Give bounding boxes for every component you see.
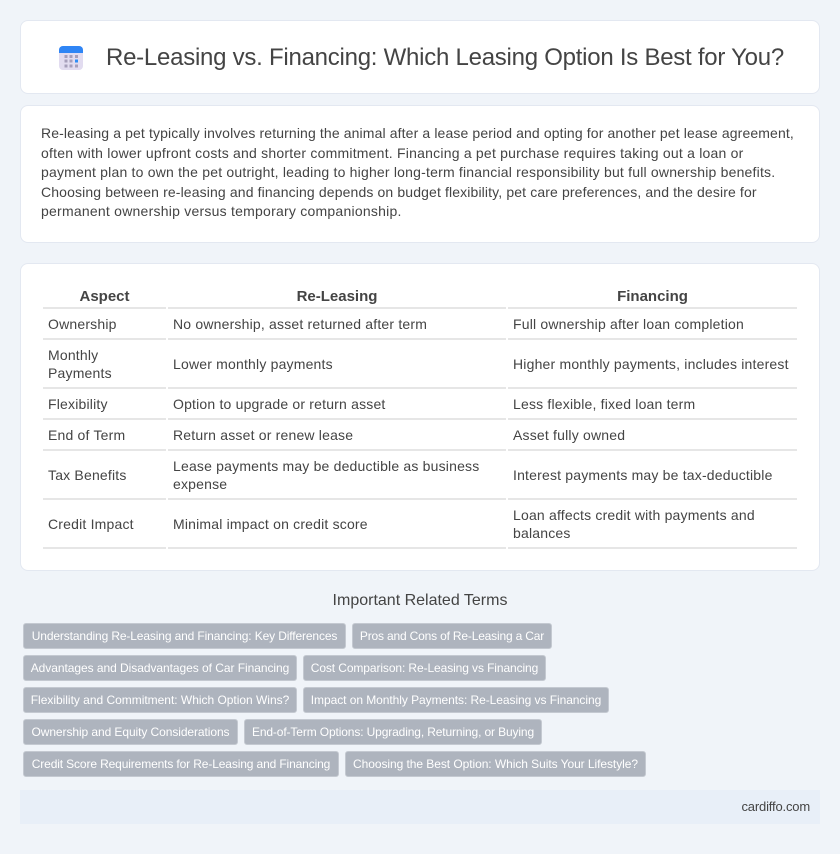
text: expense: [173, 476, 227, 492]
tags: related terms: Credit Score Requirements for Re-Leasing and Financing: [32, 757, 330, 771]
tags: related terms: Flexibility and Commitment: Which Option Wins?: [31, 693, 289, 707]
row: Flexibility: Flexibility: [48, 396, 108, 412]
tags: related terms: [23, 623, 646, 777]
table header: Re-Leasing: Re-Leasing: [297, 288, 377, 305]
text: Less flexible, fixed loan term: [513, 396, 695, 412]
tags: related terms: Choosing the Best Option: Which Suits Your Lifestyle?: [353, 757, 638, 771]
panel: comparison table: [20, 263, 820, 571]
text: Interest payments may be tax-deductible: [513, 467, 773, 483]
intro text: often with lower upfront costs and shorter commitment. Financing a pet purchase requires taking out a loan or: [41, 145, 744, 161]
tags: related terms: Understanding Re-Leasing and Financing: Key Differences: [32, 629, 337, 643]
text: Asset fully owned: [513, 427, 625, 443]
intro text: permanent ownership versus temporary companionship.: [41, 203, 402, 219]
tags: related terms: Ownership and Equity Considerations: [32, 725, 229, 739]
text: Loan affects credit with payments and: [513, 507, 755, 523]
text: Option to upgrade or return asset: [173, 396, 386, 412]
tags: related terms: Impact on Monthly Payments: Re-Leasing vs Financing: [311, 693, 601, 707]
panel: introduction: [20, 105, 820, 243]
panel: header: [20, 20, 820, 94]
footer text: cardiffo.com: [741, 799, 810, 814]
icon: calendar: [59, 46, 83, 70]
tags: related terms: Advantages and Disadvantages of Car Financing: [31, 661, 289, 675]
text: Full ownership after loan completion: [513, 316, 744, 332]
intro text: Choosing between re-leasing and financing depends on budget flexibility, pet care preferences, and the desire for: [41, 184, 757, 200]
text: Lower monthly payments: [173, 356, 333, 372]
intro text: payment plan to own the pet outright, leading to higher long-term financial responsibility but full ownership benefits.: [41, 164, 775, 180]
table header: Aspect: Aspect: [79, 288, 130, 305]
text: Minimal impact on credit score: [173, 516, 368, 532]
row: End of Term: End of Term: [48, 427, 125, 443]
tags: related terms: Pros and Cons of Re-Leasing a Car: [360, 629, 544, 643]
text: Lease payments may be deductible as business: [173, 458, 479, 474]
text: balances: [513, 525, 571, 541]
tags: related terms: Cost Comparison: Re-Leasing vs Financing: [311, 661, 538, 675]
text: Payments: [48, 365, 112, 381]
footer: [20, 790, 820, 824]
row: Monthly Payments: Monthly: [48, 347, 98, 363]
intro text: Re-leasing a pet typically involves returning the animal after a lease period and opting for another pet lease agreement,: [41, 125, 794, 141]
text: Return asset or renew lease: [173, 427, 353, 443]
text: No ownership, asset returned after term: [173, 316, 427, 332]
tags: related terms: End-of-Term Options: Upgrading, Returning, or Buying: [252, 725, 534, 739]
title: Re-Leasing vs. Financing: Which Leasing Option Is Best for You?: [106, 44, 784, 71]
table header: Financing: Financing: [617, 288, 688, 305]
row: Ownership: Ownership: [48, 316, 117, 332]
intro text: [41, 125, 794, 219]
row: Credit Impact: Credit Impact: [48, 516, 134, 532]
heading: related terms: Important Related Terms: [333, 592, 507, 609]
text: Higher monthly payments, includes interest: [513, 356, 789, 372]
row: Tax Benefits: Tax Benefits: [48, 467, 127, 483]
